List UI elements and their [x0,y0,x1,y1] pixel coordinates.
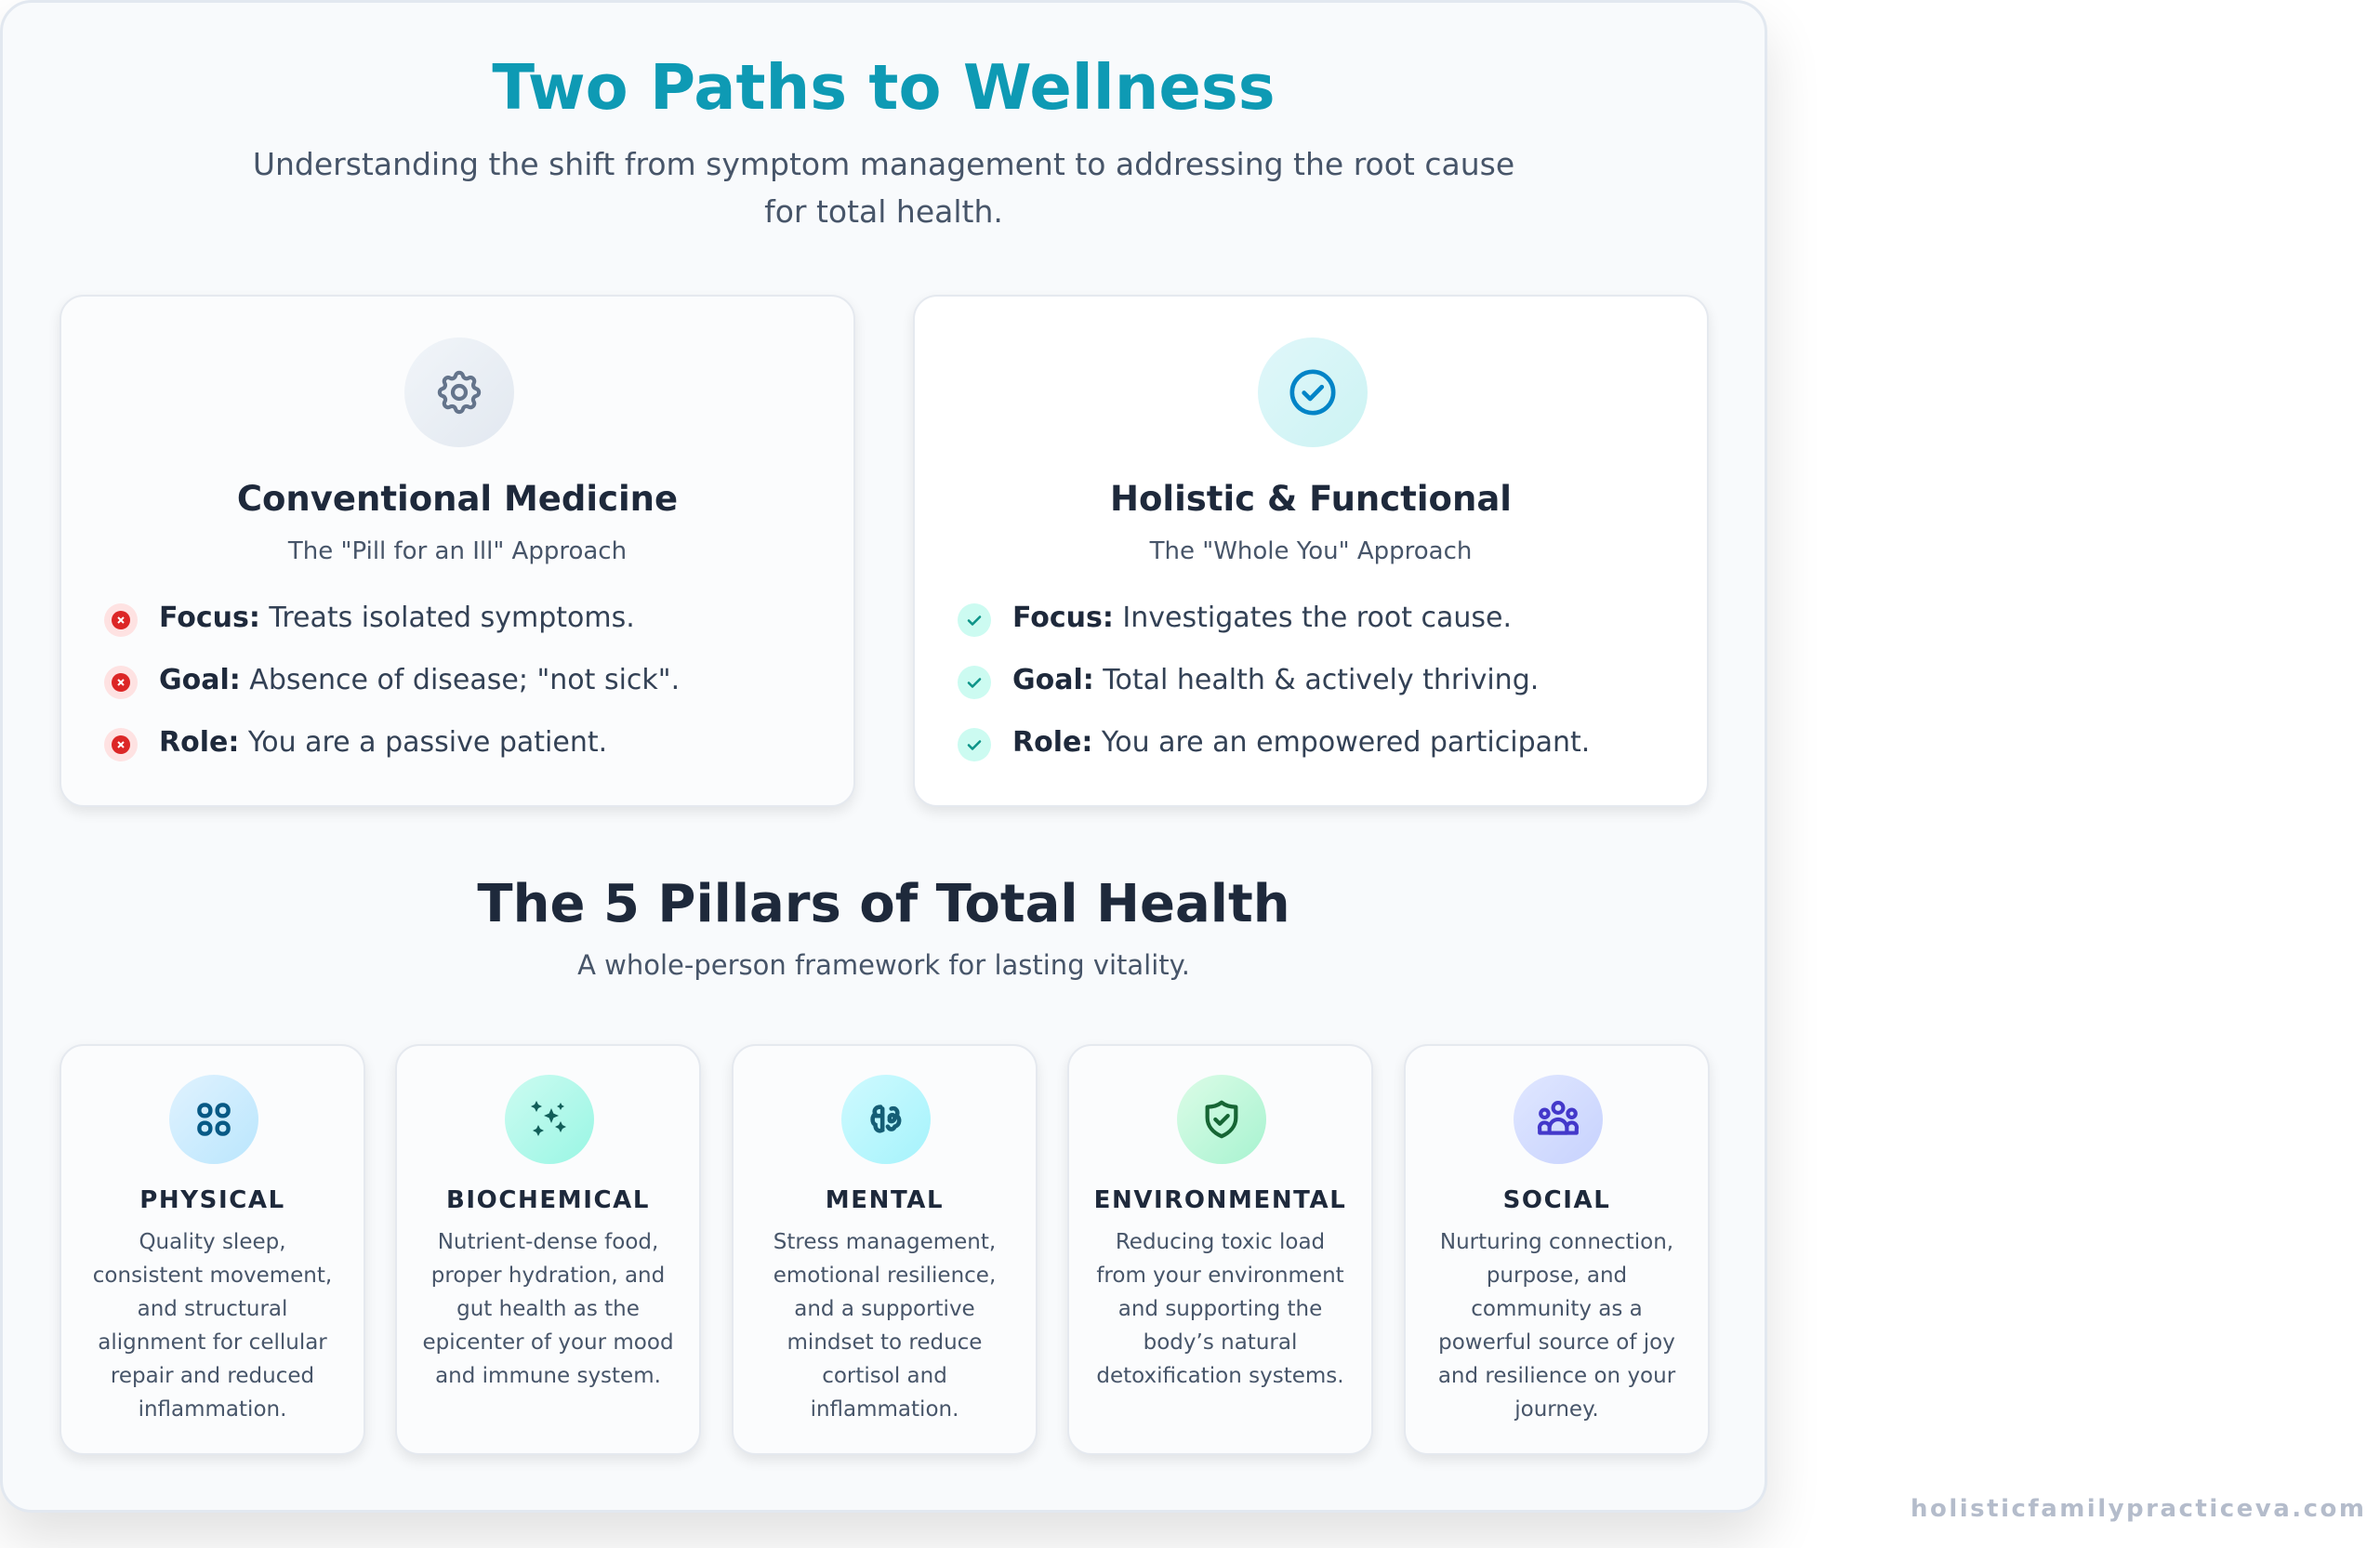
subheading: pillars: A whole-person framework for lasting vitality. [577,949,1190,981]
pillar: physical: repair and reduced [111,1364,314,1388]
subheading: The "Whole You" Approach [1150,537,1472,565]
title: Two Paths to Wellness [492,51,1276,124]
pillar: social: SOCIAL [1503,1186,1610,1214]
subtitle: for total health. [764,193,1003,230]
item: goal: Goal: Total health & actively thriving. [1012,664,1539,696]
pillar: environmental [1067,1044,1373,1455]
icon: gear [404,337,514,447]
pillar: biochemical [395,1044,701,1455]
panel: holistic & functional [913,295,1709,807]
pillar: physical: and structural [138,1297,287,1321]
subheading: The "Pill for an Ill" Approach [288,537,627,565]
pillar: physical: PHYSICAL [139,1186,285,1214]
pillar: environmental: detoxification systems. [1096,1364,1344,1388]
pillar: environmental: from your environment [1096,1264,1344,1288]
pillar: environmental: Reducing toxic load [1116,1230,1325,1254]
pillar: biochemical: gut health as the [456,1297,640,1321]
pillar: environmental: and supporting the [1118,1297,1322,1321]
pillar: social: community as a [1471,1297,1643,1321]
pillar: physical [60,1044,365,1455]
item: focus: Focus: Treats isolated symptoms. [159,602,635,634]
pillar: biochemical: Nutrient-dense food, [438,1230,658,1254]
pillar: biochemical: epicenter of your mood [422,1330,674,1355]
item: role: Role: You are an empowered participant. [1012,726,1590,759]
main panel [0,0,1767,1513]
pillar: mental: inflammation. [811,1397,959,1422]
pillar: mental [732,1044,1038,1455]
pillar: mental: emotional resilience, [774,1264,996,1288]
pillar: physical: consistent movement, [93,1264,332,1288]
icon: check circle [1258,337,1368,447]
pillar: mental: mindset to reduce [787,1330,982,1355]
heading: Conventional Medicine [237,479,678,519]
pillar: physical: Quality sleep, [139,1230,286,1254]
pillar: mental: cortisol and [822,1364,947,1388]
pillar: environmental: body’s natural [1144,1330,1297,1355]
list: holistic [958,602,1590,761]
pillar: physical: inflammation. [139,1397,286,1422]
item: role: Role: You are a passive patient. [159,726,607,759]
item: goal: Goal: Absence of disease; "not sick". [159,664,680,696]
pillar: biochemical: proper hydration, and [431,1264,665,1288]
pillar: mental: Stress management, [774,1230,996,1254]
subtitle [253,146,1514,230]
pillar: biochemical: BIOCHEMICAL [446,1186,650,1214]
pillar: social: purpose, and [1487,1264,1627,1288]
heading: 5 pillars: The 5 Pillars of Total Health [477,874,1290,934]
pillar: social: Nurturing connection, [1440,1230,1673,1254]
list: conventional [104,602,680,761]
icon: users [1514,1075,1603,1164]
pillar: environmental: ENVIRONMENTAL [1094,1186,1346,1214]
pillar: social [1404,1044,1710,1455]
pillar: mental: and a supportive [794,1297,975,1321]
pillar: social: powerful source of joy [1438,1330,1675,1355]
pillar: mental: MENTAL [826,1186,944,1214]
icon: shield check [1177,1075,1266,1164]
pillar: physical: alignment for cellular [98,1330,327,1355]
icon: grid [169,1075,258,1164]
pillar: social: journey. [1514,1397,1599,1422]
item: focus: Focus: Investigates the root cause. [1012,602,1512,634]
panel: conventional medicine [60,295,855,807]
pillar: social: and resilience on your [1438,1364,1675,1388]
subtitle: Understanding the shift from symptom management to addressing the root cause [253,146,1514,182]
heading: Holistic & Functional [1110,479,1512,519]
icon: brain [841,1075,931,1164]
watermark: holisticfamilypracticeva.com [1911,1495,2364,1523]
icon: sparkles [505,1075,594,1164]
pillar: biochemical: and immune system. [435,1364,661,1388]
